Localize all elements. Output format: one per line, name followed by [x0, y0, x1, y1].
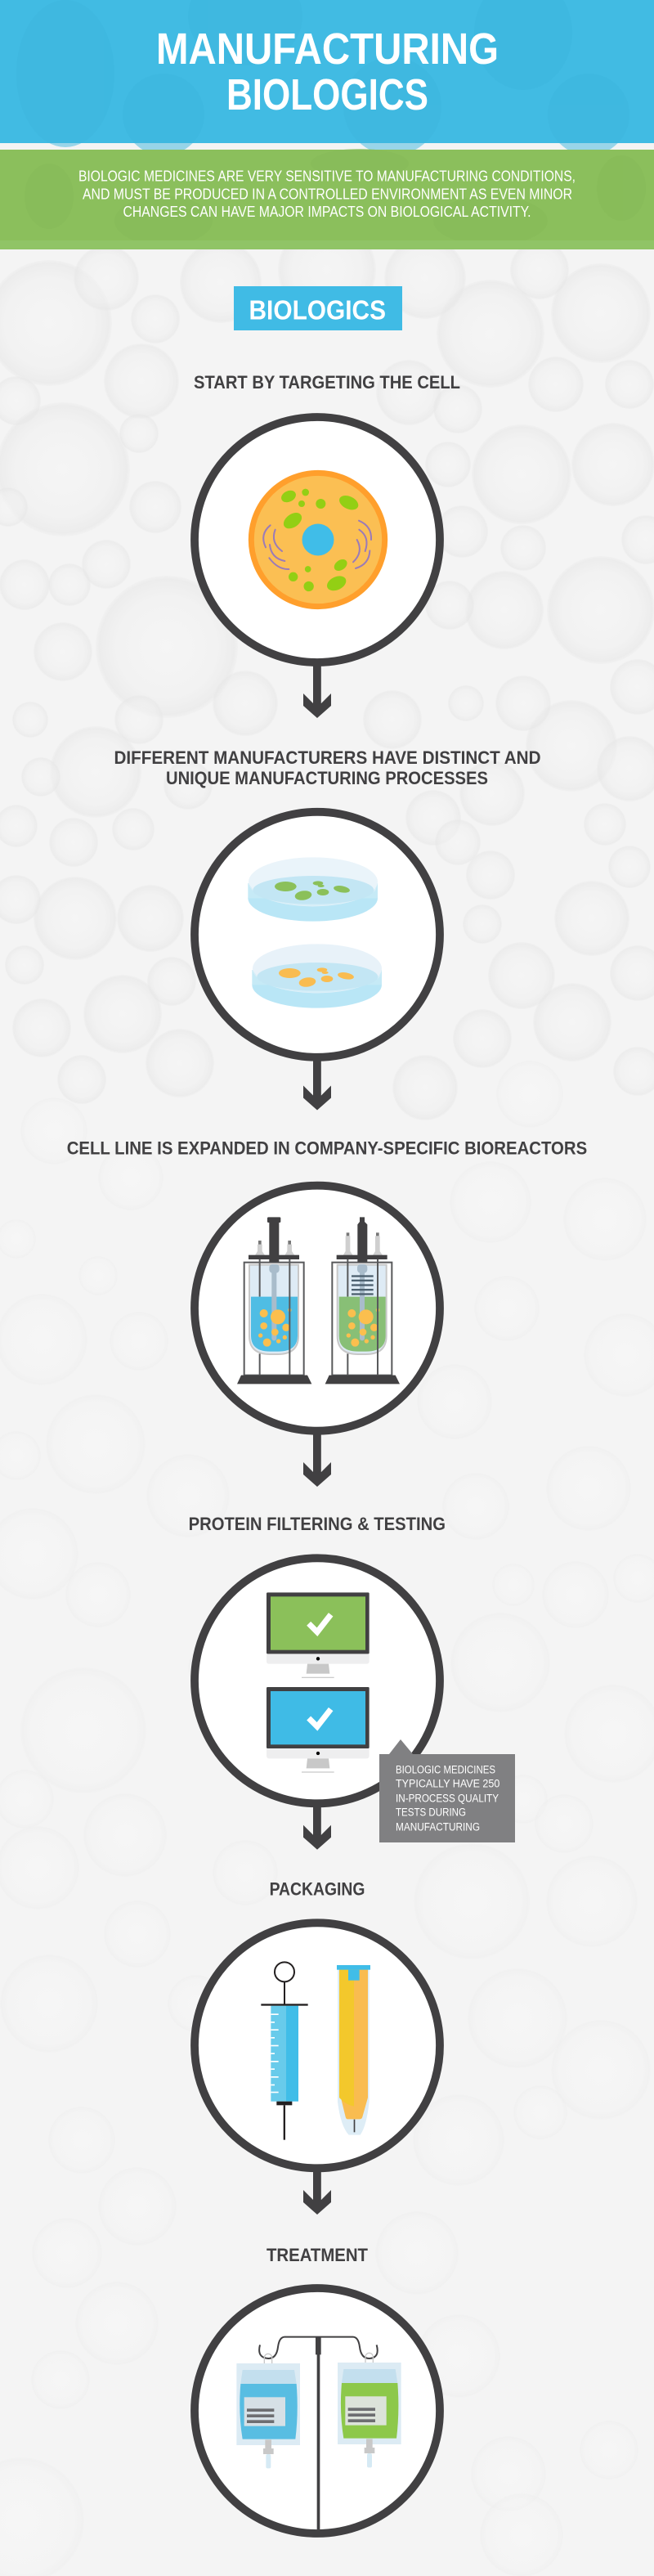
bioreactor: blue [237, 1217, 311, 1384]
IV bag: blue [236, 2354, 300, 2468]
title [156, 25, 499, 119]
heading: packaging: PACKAGING [270, 1879, 365, 1900]
heading: different manufacturers: UNIQUE MANUFACTURING PROCESSES [166, 768, 488, 788]
icon: monitors [267, 1592, 370, 1773]
intro text: CHANGES CAN HAVE MAJOR IMPACTS ON BIOLOGICAL ACTIVITY. [123, 204, 531, 220]
callout: quality tests: TYPICALLY HAVE 250 [396, 1778, 499, 1790]
petri dish: green colonies [248, 857, 378, 922]
step 6 circle: IV stand [195, 2288, 440, 2533]
icon: petri dishes [248, 857, 382, 1008]
step 4 circle: monitors [195, 1558, 440, 1803]
section badge: biologics [234, 286, 402, 330]
heading: different manufacturers [114, 747, 541, 788]
callout: quality tests: IN-PROCESS QUALITY [396, 1792, 499, 1804]
heading: different manufacturers: DIFFERENT MANUFACTURERS HAVE DISTINCT AND [114, 747, 541, 768]
monitor: green check [267, 1592, 370, 1678]
heading: protein filtering and testing: PROTEIN FILTERING & TESTING [189, 1514, 446, 1534]
step 5 circle: syringe and auto-injector [195, 1923, 440, 2168]
title: MANUFACTURING [156, 25, 499, 74]
intro text: BIOLOGIC MEDICINES ARE VERY SENSITIVE TO MANUFACTURING CONDITIONS, [78, 168, 576, 185]
title: BIOLOGICS [226, 70, 428, 119]
bioreactor: green [325, 1217, 400, 1384]
icon: cell [251, 473, 385, 607]
monitor: blue check [267, 1687, 370, 1773]
callout: quality tests: TESTS DURING [396, 1806, 466, 1819]
icon: IV stand with bags [236, 2337, 401, 2529]
intro text: AND MUST BE PRODUCED IN A CONTROLLED ENVIRONMENT AS EVEN MINOR [83, 186, 572, 203]
heading: treatment: TREATMENT [267, 2245, 368, 2265]
arrow 5 [303, 2169, 331, 2215]
IV bag: green [338, 2353, 401, 2467]
icon: bioreactors [237, 1217, 400, 1384]
arrow 1 [303, 662, 331, 718]
callout: quality tests: BIOLOGIC MEDICINES [396, 1763, 495, 1775]
step 3 circle: bioreactors [195, 1186, 440, 1431]
icon: auto-injector pen [337, 1965, 370, 2135]
arrow 3 [303, 1431, 331, 1487]
heading: cell line expanded: CELL LINE IS EXPANDED IN COMPANY-SPECIFIC BIOREACTORS [67, 1138, 587, 1159]
heading: start by targeting the cell: START BY TARGETING THE CELL [194, 372, 460, 393]
header band: blue [0, 0, 654, 155]
step 2 circle: petri dishes [195, 812, 440, 1057]
arrow 2 [303, 1057, 331, 1111]
callout: quality tests: MANUFACTURING [396, 1820, 480, 1833]
icon: syringe [261, 1962, 308, 2140]
section badge: biologics: BIOLOGICS [249, 294, 386, 325]
intro text [78, 168, 576, 220]
callout: quality tests [379, 1739, 515, 1842]
step 1 circle: cell [195, 417, 440, 662]
intro band: green [0, 149, 654, 249]
arrow 4 [303, 1804, 331, 1850]
petri dish: orange colonies [252, 944, 382, 1008]
